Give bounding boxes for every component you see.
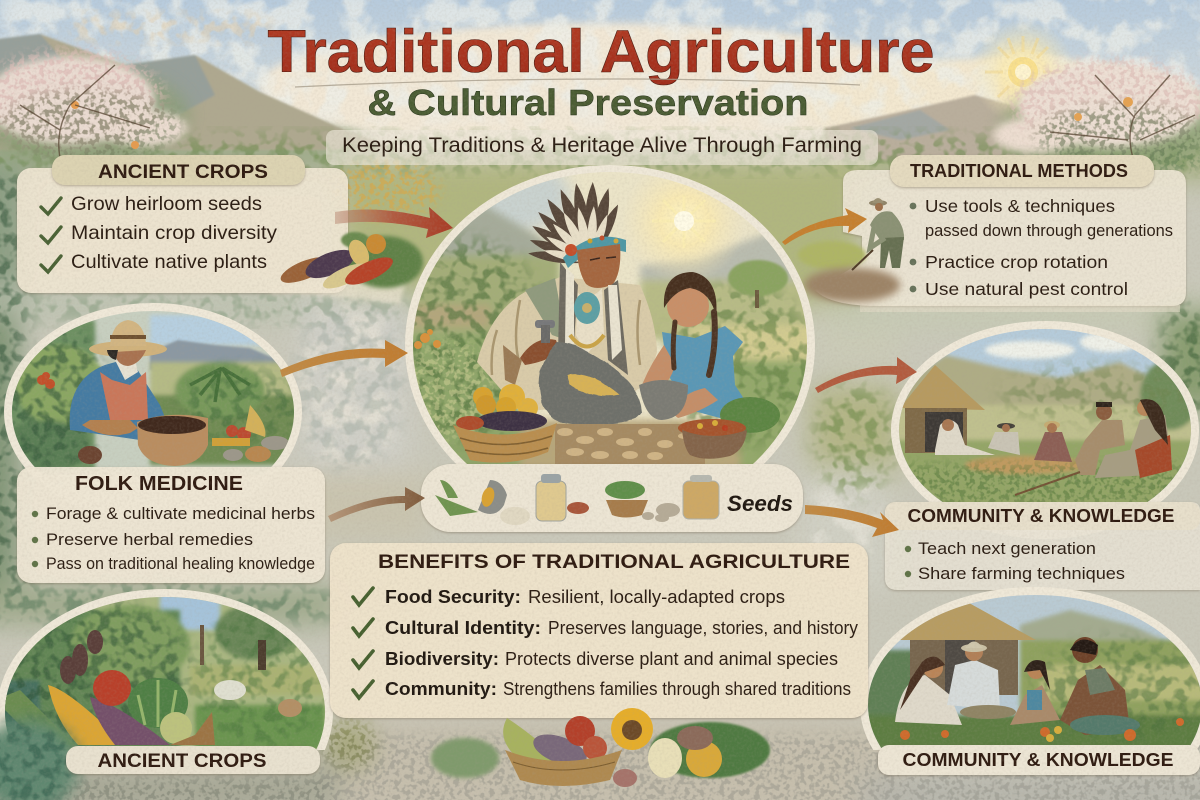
- soft cream strip under the corn: [270, 281, 405, 304]
- icon: pebbles: [642, 503, 680, 522]
- label: ancient crops: ANCIENT CROPS: [98, 751, 266, 772]
- panel: folk medicine: Pass on traditional healing knowledge: [46, 555, 315, 573]
- illustration: farmer hoeing: [798, 198, 904, 302]
- panel: traditional methods: [798, 155, 1186, 312]
- tagline banner: [326, 130, 878, 165]
- label: community and knowledge: COMMUNITY & KNOWLEDGE: [902, 749, 1174, 770]
- panel: community and knowledge: Share farming techniques: [918, 564, 1125, 583]
- heading: ancient crops: ANCIENT CROPS: [98, 162, 268, 183]
- illustration: folk medicine gardener: [4, 303, 302, 468]
- title: Traditional Agriculture: Traditional Agriculture: [268, 18, 934, 85]
- mountains: [0, 34, 1075, 160]
- benefit: cultural identity: Cultural Identity:: [385, 617, 541, 638]
- benefit: cultural identity: [385, 617, 858, 638]
- panel: folk medicine: FOLK MEDICINE: [75, 473, 243, 495]
- child figure: [642, 272, 748, 418]
- benefit: biodiversity: [385, 648, 838, 669]
- panel: community and knowledge: Teach next generation: [918, 539, 1096, 558]
- check list: Maintain crop diversity: [71, 222, 277, 244]
- benefit: community: Strengthens families through shared traditions: [503, 679, 851, 699]
- benefit: food security: Food Security:: [385, 586, 521, 607]
- icon: red seeds: [567, 502, 589, 514]
- benefit: community: Community:: [385, 678, 497, 699]
- central illustration: elder and child grinding seeds: [405, 165, 815, 464]
- check list: Grow heirloom seeds: [71, 193, 262, 215]
- heading: traditional methods: [890, 155, 1154, 187]
- arrow: ancient crops to centre: [335, 207, 453, 238]
- check list: Cultivate native plants: [71, 251, 267, 273]
- mortar with grain: [539, 342, 642, 425]
- elder figure: [477, 182, 657, 412]
- blossom tree left: [0, 50, 190, 165]
- left basket: [453, 384, 557, 463]
- heading: ancient crops: [52, 155, 305, 185]
- benefit: biodiversity: Biodiversity:: [385, 648, 499, 669]
- icon: seed jar: [683, 475, 719, 519]
- panel: folk medicine: Preserve herbal remedies: [46, 531, 253, 549]
- icon: grain jar: [536, 474, 566, 521]
- arrow: seeds to community: [805, 505, 899, 537]
- panel: community and knowledge: [885, 502, 1200, 590]
- bullet list: passed down through generations: [925, 222, 1173, 240]
- arrow: folk medicine to seeds: [328, 487, 425, 522]
- feather headdress: [528, 182, 623, 267]
- foliage: lower left corner: [0, 719, 78, 800]
- arrow: centre to community: [815, 357, 917, 393]
- arrow: centre to traditional methods: [782, 208, 867, 245]
- arrow: folk medicine to centre: [280, 340, 408, 377]
- panel: benefits of traditional agriculture: [330, 543, 868, 718]
- illustration: ancient crops harvest: [0, 589, 333, 750]
- panel: ancient crops: [17, 155, 423, 304]
- banner: seeds display: [421, 464, 803, 532]
- title underline stroke: [295, 79, 860, 87]
- label: community and knowledge: [878, 745, 1200, 775]
- icon: herb basket: [605, 481, 648, 518]
- benefit: community: [385, 678, 851, 699]
- field dabs: [0, 135, 1200, 170]
- blossom tree right: [993, 59, 1200, 173]
- bullet list: Use natural pest control: [925, 279, 1128, 299]
- sun: [971, 20, 1075, 124]
- bullet list: Use tools & techniques: [925, 196, 1115, 216]
- icon: halved stone mortar: [478, 480, 507, 514]
- icon: herb leaves: [435, 480, 478, 516]
- bullet list: [910, 196, 1173, 299]
- panel: folk medicine: [17, 467, 325, 583]
- benefit: biodiversity: Protects diverse plant and animal species: [505, 649, 838, 669]
- benefit: cultural identity: Preserves language, stories, and history: [548, 618, 858, 638]
- pebble seeds ground: [555, 424, 705, 464]
- small stone mortar: [639, 380, 688, 420]
- right bowl: [678, 397, 780, 459]
- bullet list: Practice crop rotation: [925, 252, 1108, 272]
- panel: community and knowledge: COMMUNITY & KNOWLEDGE: [908, 505, 1174, 526]
- seeds label: Seeds: [727, 491, 793, 516]
- illustration: community gathering at hut: [891, 321, 1199, 502]
- distant clouds and dabs: [0, 0, 1200, 120]
- illustration: heirloom corn pile: [278, 232, 423, 293]
- heading: traditional methods: TRADITIONAL METHODS: [910, 161, 1128, 181]
- label: ancient crops: [66, 746, 320, 774]
- illustration: family sharing food: [860, 587, 1200, 750]
- check marks: [353, 588, 373, 698]
- benefit: food security: Resilient, locally-adapted crops: [528, 587, 785, 607]
- subtitle: and Cultural Preservation: & Cultural Preservation: [368, 82, 808, 123]
- benefit: food security: [385, 586, 785, 607]
- heading: benefits: BENEFITS OF TRADITIONAL AGRICULTURE: [378, 552, 850, 573]
- illustration: harvest basket with sunflower: [431, 708, 770, 787]
- tagline banner: Keeping Traditions & Heritage Alive Through Farming: [342, 134, 862, 157]
- panel: folk medicine: Forage & cultivate medicinal herbs: [46, 505, 315, 523]
- icon: garlic: [500, 507, 530, 525]
- check list: [41, 193, 277, 273]
